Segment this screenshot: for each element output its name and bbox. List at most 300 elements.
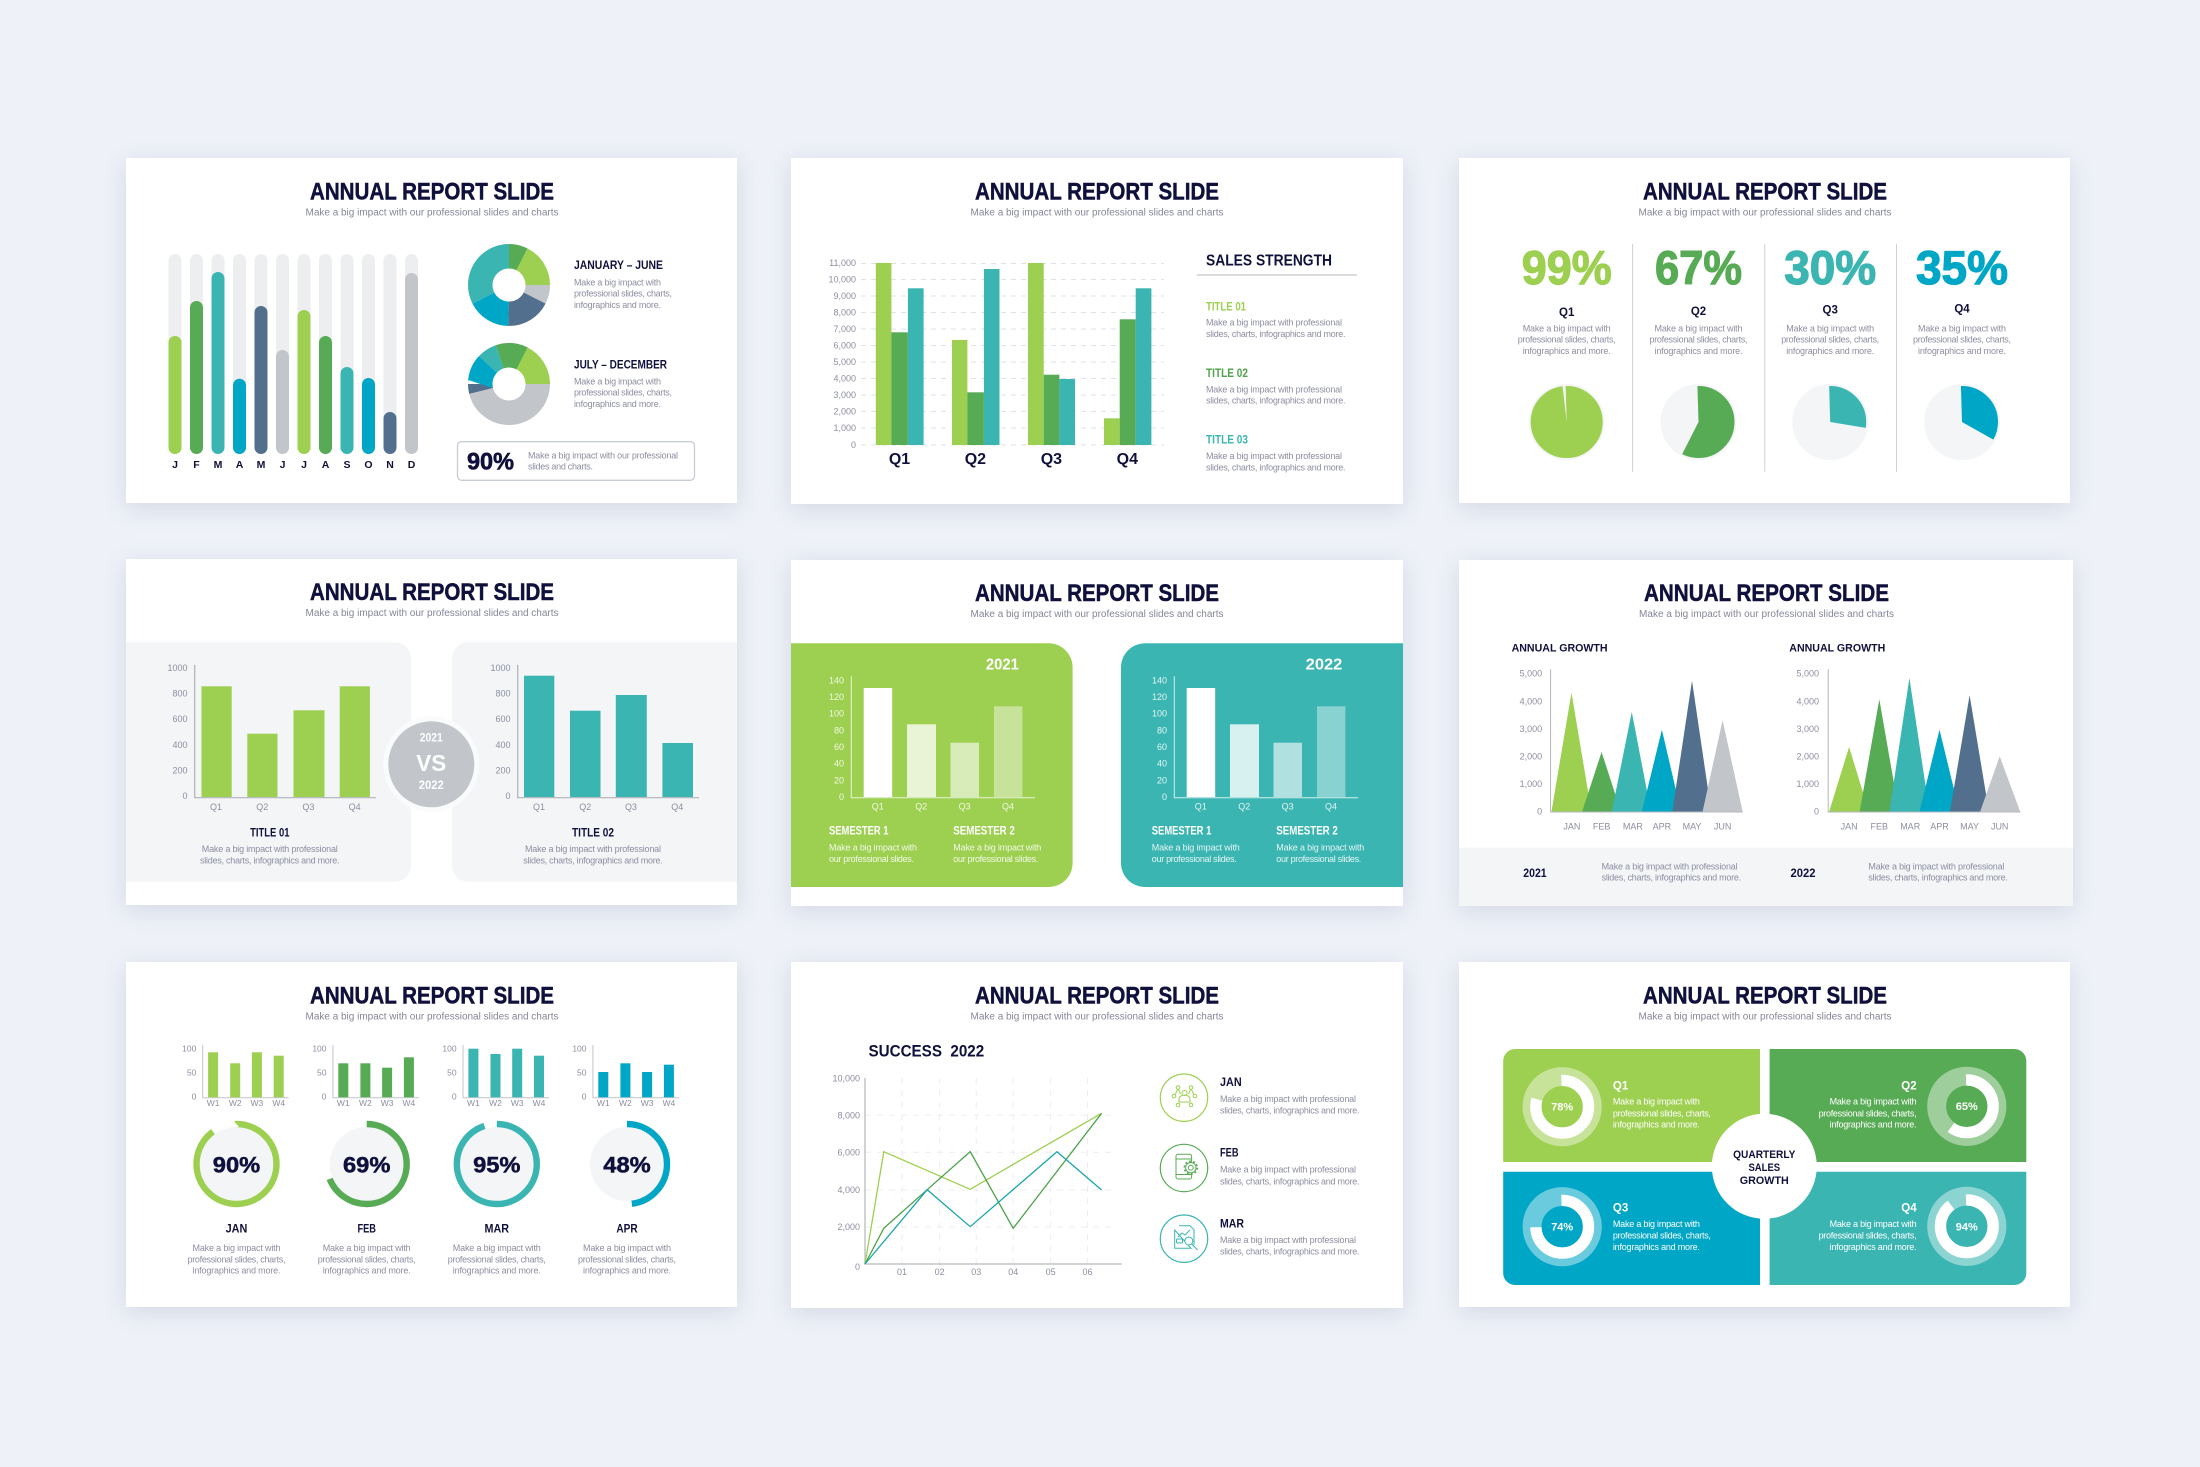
panel: Q4: 94% (1956, 1221, 1978, 1233)
icon: phone with gear (1160, 1144, 1208, 1192)
panel: 2022 teal: 80 (1157, 725, 1167, 735)
panel: 2021 green: our professional slides. (829, 854, 914, 864)
chart: annual growth 2022: JUN (1991, 822, 2008, 832)
column: February: W3 (381, 1098, 394, 1108)
text block: February: Make a big impact with professional (1220, 1165, 1356, 1175)
footer band with notes: Make a big impact with professional (1868, 861, 2004, 871)
text block: title 02: slides, charts, infographics and more. (1206, 396, 1346, 406)
text block: January (1220, 1077, 1360, 1115)
chart: line chart (832, 1073, 1122, 1277)
panel: Q3: Make a big impact with (1613, 1219, 1700, 1229)
column: January: 50 (187, 1067, 197, 1077)
chart: annual growth 2022: 1,000 (1796, 779, 1819, 789)
panel: 2021 green: SEMESTER 2 (953, 826, 1015, 838)
chart: grouped bars by quarter: Q4 (1117, 451, 1138, 468)
chart: annual growth 2022: APR (1930, 822, 1949, 832)
column: Q4 35 percent: professional slides, charts, (1913, 335, 2011, 345)
chart: line chart: 10,000 (832, 1073, 860, 1083)
panel: 2021 green: Q1 (872, 801, 884, 811)
chart: monthly rounded bars: M (257, 459, 266, 471)
chart: monthly rounded bars: N (386, 459, 394, 471)
text block: January: Make a big impact with professional (1220, 1094, 1356, 1104)
chart: left bars title 01: 1000 (167, 663, 188, 673)
panel: 2021 green: our professional slides. (953, 854, 1038, 864)
chart: annual growth 2021: 2,000 (1520, 752, 1542, 762)
chart: grouped bars by quarter: 8,000 (833, 308, 856, 318)
chart: annual growth 2021: 1,000 (1520, 779, 1542, 789)
column: February: W4 (403, 1098, 416, 1108)
chart: grouped bars by quarter: 3,000 (833, 390, 856, 400)
column: April: 100 (572, 1043, 587, 1053)
panel: 2021 green: Make a big impact with (829, 842, 917, 852)
text block: title 02: slides, charts, infographics and more. (523, 855, 663, 865)
text block: July to December: infographics and more. (574, 399, 661, 409)
panel: 2021 green: Make a big impact with (953, 842, 1041, 852)
column: January: 100 (182, 1043, 197, 1053)
panel: 2022 teal: Make a big impact with (1152, 842, 1240, 852)
subtitle: Make a big impact with our professional slides and charts (970, 208, 1224, 218)
column: April: infographics and more. (583, 1266, 671, 1276)
column: Q1 99 percent: infographics and more. (1523, 346, 1611, 356)
panel: 2021 green: 40 (834, 759, 844, 769)
panel: slide 5 yearly semester bars (791, 560, 1403, 906)
column: February: infographics and more. (323, 1266, 411, 1276)
column: February: W2 (359, 1098, 372, 1108)
chart: left bars title 01: 400 (172, 740, 188, 750)
panel: 2021 green: Q3 (959, 801, 971, 811)
chart: line chart: 02 (935, 1267, 945, 1277)
panel: Q1: professional slides, charts, (1613, 1108, 1711, 1118)
column: April: W2 (619, 1098, 632, 1108)
column: February (312, 1043, 419, 1276)
text block: title 01: Make a big impact with professional (202, 844, 338, 854)
chart: grouped bars by quarter: 0 (851, 440, 856, 450)
chart: right bars title 02 (490, 663, 699, 812)
chart: right bars title 02: 600 (495, 714, 510, 724)
text block: title 03: TITLE 03 (1206, 434, 1248, 446)
text block: title 03: Make a big impact with professional (1206, 451, 1342, 461)
panel: 2022 teal: Q1 (1195, 801, 1207, 811)
column: Q1 99 percent: Q1 (1559, 307, 1575, 319)
panel: 2021 green: 2021 (986, 657, 1019, 674)
text block: title 01 (1206, 301, 1346, 339)
panel: 2022 teal: 2022 (1306, 657, 1342, 674)
badge: 2021 vs 2022: 2022 (419, 778, 444, 792)
panel: Q2: infographics and more. (1830, 1120, 1917, 1130)
chart: annual growth 2022: FEB (1871, 822, 1888, 832)
chart: annual growth 2021: FEB (1593, 822, 1610, 832)
callout: 90 percent: slides and charts. (528, 462, 593, 472)
column: January: W3 (251, 1098, 264, 1108)
text block: title 01 (200, 828, 340, 865)
footer band with notes (1459, 848, 2073, 906)
column: Q4 35 percent: infographics and more. (1918, 346, 2006, 356)
panel: Q4 (1770, 1172, 2026, 1285)
column: Q3 30 percent: Q3 (1823, 305, 1838, 317)
chart: grouped bars by quarter: Q3 (1041, 451, 1062, 468)
chart: line chart: 05 (1046, 1267, 1056, 1277)
callout: 90 percent: Make a big impact with our professional (528, 450, 678, 460)
column: March: W1 (467, 1098, 480, 1108)
chart: donut July to December (480, 355, 538, 413)
column: January: 0 (192, 1091, 197, 1101)
chart: annual growth 2021: APR (1653, 822, 1672, 832)
text block: title 01: TITLE 01 (1206, 301, 1246, 313)
chart: right bars title 02: 200 (495, 766, 510, 776)
text block: title 03 (1206, 434, 1346, 472)
chart: line chart: 0 (855, 1262, 860, 1272)
column: Q1 99 percent: 99% (1522, 241, 1612, 294)
footer band with notes: 2022 (1790, 866, 1816, 880)
panel: Q3: infographics and more. (1613, 1242, 1700, 1252)
chart: grouped bars by quarter: Q1 (889, 451, 910, 468)
subtitle: Make a big impact with our professional slides and charts (970, 1012, 1224, 1022)
panel: Q1: Make a big impact with (1613, 1097, 1700, 1107)
column: April: W4 (663, 1098, 676, 1108)
panel: 2022 teal: 40 (1157, 759, 1167, 769)
panel: 2021 green (791, 643, 1073, 887)
badge: 2021 vs 2022: 2021 (420, 731, 443, 745)
column: April: APR (616, 1224, 638, 1236)
panel: 2022 teal: 0 (1162, 792, 1167, 802)
chart: annual growth 2021: 3,000 (1520, 724, 1542, 734)
chart: grouped bars by quarter: 11,000 (829, 258, 856, 268)
chart: monthly rounded bars: J (280, 459, 286, 471)
chart: monthly rounded bars: D (408, 459, 416, 471)
column: Q2 67 percent: Q2 (1691, 306, 1706, 318)
column: Q1 99 percent (1518, 241, 1616, 460)
panel: Q1: Q1 (1613, 1081, 1629, 1093)
chart: left bars title 01: Q3 (302, 802, 314, 812)
column: Q2 67 percent: professional slides, charts, (1650, 335, 1748, 345)
panel: 2022 teal: SEMESTER 1 (1152, 826, 1212, 838)
chart: annual growth 2021: 5,000 (1520, 669, 1542, 679)
text block: January: JAN (1220, 1077, 1242, 1089)
column: March: MAR (485, 1224, 510, 1236)
column: January: W1 (207, 1098, 220, 1108)
chart: annual growth 2022: 5,000 (1796, 669, 1819, 679)
panel: 2021 green: Q2 (915, 801, 927, 811)
badge: quarterly sales growth: QUARTERLY (1733, 1149, 1796, 1161)
chart: annual growth 2021 (1512, 642, 1743, 832)
text block: March (1220, 1218, 1360, 1256)
footer band with notes: 2021 (1523, 866, 1547, 880)
title: ANNUAL REPORT SLIDE (975, 982, 1219, 1009)
column: February: professional slides, charts, (318, 1254, 416, 1264)
column: March: 100 (442, 1043, 457, 1053)
panel: slide 7 monthly rings (126, 962, 737, 1307)
heading: sales strength: SALES STRENGTH (1206, 253, 1332, 270)
panel: 2022 teal: 20 (1157, 775, 1167, 785)
chart: annual growth 2022: 0 (1814, 807, 1819, 817)
subtitle: Make a big impact with our professional slides and charts (1639, 609, 1894, 620)
panel: 2022 teal (1121, 643, 1403, 887)
chart: annual growth 2021: 0 (1537, 807, 1542, 817)
column: Q3 30 percent: Make a big impact with (1786, 323, 1874, 333)
text block: title 02: Make a big impact with professional (525, 844, 661, 854)
column: February: 50 (317, 1067, 327, 1077)
panel: slide 4 versus comparison (126, 559, 737, 905)
title: ANNUAL REPORT SLIDE (310, 579, 554, 606)
chart: monthly rounded bars: M (214, 459, 223, 471)
title: ANNUAL REPORT SLIDE (1644, 580, 1889, 607)
panel: Q2: Q2 (1901, 1081, 1917, 1093)
chart: left bars title 01: Q4 (349, 802, 361, 812)
panel: Q3: 74% (1551, 1222, 1573, 1234)
chart: line chart: 4,000 (837, 1185, 860, 1195)
column: February: 0 (322, 1091, 327, 1101)
column: Q2 67 percent (1650, 241, 1748, 460)
column: Q4 35 percent: Q4 (1954, 303, 1970, 315)
chart: line chart: 01 (897, 1267, 907, 1277)
column: January: Make a big impact with (192, 1243, 280, 1253)
column: March: infographics and more. (453, 1266, 541, 1276)
text block: January: slides, charts, infographics and more. (1220, 1105, 1360, 1115)
column: January: W4 (272, 1098, 285, 1108)
chart: monthly rounded bars: J (301, 459, 307, 471)
chart: annual growth 2022: ANNUAL GROWTH (1789, 642, 1885, 654)
panel: 2022 teal: 100 (1152, 709, 1167, 719)
panel: Q2: professional slides, charts, (1819, 1108, 1917, 1118)
chart: monthly rounded bars: O (364, 459, 373, 471)
chart: left bars title 01: 600 (172, 714, 188, 724)
column: January: professional slides, charts, (188, 1254, 286, 1264)
chart: annual growth 2021: ANNUAL GROWTH (1512, 642, 1608, 654)
column: Q4 35 percent: 35% (1916, 241, 2008, 294)
text block: January to June: Make a big impact with (574, 277, 661, 287)
column: April (572, 1043, 679, 1276)
chart: grouped bars by quarter: 1,000 (833, 423, 856, 433)
chart: left bars title 01: 800 (172, 688, 188, 698)
subtitle: Make a big impact with our professional slides and charts (1638, 1012, 1892, 1022)
chart: annual growth 2021: JUN (1714, 822, 1731, 832)
chart: annual growth 2022: 4,000 (1796, 696, 1819, 706)
panel: right comparison background (452, 642, 737, 882)
panel: 2021 green: 60 (834, 742, 844, 752)
text block: January to June (574, 260, 672, 310)
chart: grouped bars by quarter: 6,000 (833, 340, 856, 350)
column: February: 69% (343, 1153, 390, 1178)
panel: Q2: Make a big impact with (1830, 1097, 1917, 1107)
text block: title 02: Make a big impact with professional (1206, 384, 1342, 394)
chart: monthly rounded bars: J (172, 459, 178, 471)
chart: right bars title 02: Q4 (671, 802, 683, 812)
chart: line chart: 06 (1082, 1267, 1093, 1277)
panel: slide 1 monthly bars and donuts (126, 158, 737, 503)
chart: right bars title 02: 800 (495, 688, 510, 698)
text block: March: Make a big impact with professional (1220, 1235, 1356, 1245)
chart: monthly rounded bars (168, 254, 418, 471)
icon: people group (1160, 1074, 1208, 1121)
column: January: 90% (213, 1153, 260, 1178)
chart: annual growth 2021: MAR (1623, 822, 1643, 832)
chart: annual growth 2021: JAN (1563, 822, 1580, 832)
panel: Q2 (1770, 1049, 2026, 1162)
column: Q3 30 percent: professional slides, charts, (1781, 335, 1879, 345)
column: March: professional slides, charts, (448, 1254, 546, 1264)
panel: 2021 green: 0 (839, 792, 844, 802)
chart: monthly rounded bars: F (193, 459, 200, 471)
text block: January to June: JANUARY – JUNE (574, 260, 663, 272)
chart: grouped bars by quarter: 4,000 (833, 374, 856, 384)
column: February: FEB (357, 1224, 376, 1236)
chart: line chart: 04 (1008, 1267, 1018, 1277)
chart: left bars title 01: Q2 (256, 802, 268, 812)
column: Q3 30 percent (1781, 241, 1879, 460)
chart: line chart: 6,000 (837, 1147, 860, 1157)
panel: Q4: professional slides, charts, (1819, 1231, 1917, 1241)
text block: July to December: JULY – DECEMBER (574, 359, 668, 371)
badge: quarterly sales growth: GROWTH (1740, 1175, 1789, 1187)
column: Q3 30 percent: 30% (1784, 241, 1876, 294)
column: April: 48% (603, 1153, 651, 1178)
chart: monthly rounded bars: A (236, 459, 244, 471)
column: January: infographics and more. (192, 1266, 280, 1276)
column: Q2 67 percent: infographics and more. (1654, 346, 1742, 356)
panel: 2021 green: Q4 (1002, 801, 1014, 811)
panel: Q2: 65% (1956, 1101, 1978, 1113)
column: Q4 35 percent (1913, 241, 2011, 460)
chart: annual growth 2022: MAR (1900, 822, 1921, 832)
title: ANNUAL REPORT SLIDE (310, 982, 554, 1009)
chart: grouped bars by quarter: 2,000 (833, 406, 856, 416)
column: January (182, 1043, 289, 1276)
chart: right bars title 02: 400 (495, 740, 510, 750)
heading: success 2022: SUCCESS 2022 (868, 1043, 984, 1061)
column: March: Make a big impact with (453, 1243, 541, 1253)
chart: right bars title 02: 0 (505, 791, 510, 801)
column: March: 95% (473, 1153, 520, 1178)
chart: left bars title 01 (167, 663, 376, 812)
chart: annual growth 2022 (1789, 642, 2020, 832)
chart: donut January to June (480, 256, 538, 314)
text block: title 02: TITLE 02 (1206, 368, 1248, 380)
panel: Q1: 78% (1551, 1101, 1573, 1113)
panel: 2021 green: 80 (834, 725, 844, 735)
chart: right bars title 02: 1000 (490, 663, 510, 673)
chart: annual growth 2021: 4,000 (1520, 696, 1542, 706)
column: February: 100 (312, 1043, 327, 1053)
badge: quarterly sales growth (1712, 1114, 1817, 1219)
panel: 2022 teal: our professional slides. (1152, 854, 1237, 864)
column: March (442, 1043, 549, 1276)
panel: Q4: Q4 (1901, 1203, 1917, 1215)
column: March: W2 (489, 1098, 502, 1108)
chart: grouped bars by quarter: 5,000 (833, 357, 856, 367)
panel: 2021 green: 120 (829, 692, 844, 702)
panel: 2021 green: SEMESTER 1 (829, 826, 889, 838)
panel: slide 2 sales strength (791, 158, 1403, 504)
callout: 90 percent: 90% (467, 448, 514, 475)
chart: annual growth 2022: MAY (1960, 822, 1979, 832)
subtitle: Make a big impact with our professional slides and charts (306, 1012, 558, 1022)
column: January: W2 (229, 1098, 242, 1108)
chart: grouped bars by quarter: Q2 (965, 451, 986, 468)
panel: 2022 teal: SEMESTER 2 (1276, 826, 1338, 838)
subtitle: Make a big impact with our professional slides and charts (306, 208, 558, 218)
text block: title 02 (523, 828, 663, 865)
chart: line chart: 8,000 (837, 1110, 860, 1120)
chart: grouped bars by quarter: 7,000 (833, 324, 856, 334)
chart: annual growth 2021: MAY (1683, 822, 1701, 832)
column: January: JAN (226, 1224, 247, 1236)
subtitle: Make a big impact with our professional slides and charts (970, 609, 1224, 620)
text block: title 01: slides, charts, infographics and more. (1206, 329, 1346, 339)
column: February: W1 (337, 1098, 350, 1108)
title: ANNUAL REPORT SLIDE (975, 580, 1219, 607)
panel: 2022 teal: Q2 (1238, 801, 1250, 811)
panel: 2022 teal: Q4 (1325, 801, 1337, 811)
icon: document with magnifier (1160, 1215, 1208, 1262)
column: March: W4 (533, 1098, 546, 1108)
badge: quarterly sales growth: SALES (1748, 1162, 1780, 1174)
title: ANNUAL REPORT SLIDE (1643, 982, 1887, 1009)
text block: title 01: slides, charts, infographics and more. (200, 855, 340, 865)
subtitle: Make a big impact with our professional slides and charts (1638, 208, 1892, 218)
chart: grouped bars by quarter: 9,000 (833, 291, 856, 301)
chart: monthly rounded bars: S (343, 459, 351, 471)
text block: July to December (574, 359, 672, 409)
panel: Q3 (1503, 1172, 1760, 1285)
panel: 2022 teal: 140 (1152, 675, 1167, 685)
text block: March: slides, charts, infographics and more. (1220, 1246, 1360, 1256)
panel: slide 6 annual growth triangles (1459, 560, 2073, 906)
text block: title 02 (1206, 368, 1346, 406)
panel: Q4: Make a big impact with (1830, 1219, 1917, 1229)
text block: February: slides, charts, infographics and more. (1220, 1176, 1360, 1186)
title: ANNUAL REPORT SLIDE (1643, 179, 1887, 206)
panel: 2022 teal: Make a big impact with (1276, 842, 1364, 852)
column: Q3 30 percent: infographics and more. (1786, 346, 1874, 356)
chart: grouped bars by quarter: 10,000 (828, 274, 856, 284)
column: March: 0 (452, 1091, 457, 1101)
text block: July to December: Make a big impact with (574, 376, 661, 386)
column: April: W3 (641, 1098, 654, 1108)
panel: 2022 teal: 60 (1157, 742, 1167, 752)
footer band with notes: slides, charts, infographics and more. (1602, 873, 1741, 883)
panel: slide 8 line chart (791, 962, 1403, 1308)
panel: 2022 teal: our professional slides. (1276, 854, 1361, 864)
footer band with notes: slides, charts, infographics and more. (1868, 873, 2008, 883)
panel: Q4: infographics and more. (1830, 1242, 1917, 1252)
panel: slide 9 quarterly sales growth (1459, 962, 2070, 1307)
column: April: professional slides, charts, (578, 1254, 676, 1264)
column: Q1 99 percent: Make a big impact with (1523, 323, 1611, 333)
text block: title 01: TITLE 01 (250, 828, 290, 840)
panel: slide 3 quarterly percentages (1459, 158, 2070, 503)
panel: Q3: professional slides, charts, (1613, 1231, 1711, 1241)
chart: annual growth 2022: 3,000 (1796, 724, 1819, 734)
column: March: W3 (511, 1098, 524, 1108)
subtitle: Make a big impact with our professional slides and charts (306, 608, 558, 619)
chart: right bars title 02: Q1 (533, 802, 545, 812)
chart: grouped bars by quarter (828, 258, 1164, 468)
chart: right bars title 02: Q3 (625, 802, 637, 812)
footer band with notes: Make a big impact with professional (1602, 861, 1738, 871)
column: April: 50 (577, 1067, 587, 1077)
panel: 2022 teal: 120 (1152, 692, 1167, 702)
panel: 2021 green: 140 (829, 675, 844, 685)
text block: January to June: infographics and more. (574, 300, 661, 310)
column: Q2 67 percent: Make a big impact with (1654, 323, 1742, 333)
column: Q2 67 percent: 67% (1655, 241, 1742, 294)
title: ANNUAL REPORT SLIDE (975, 179, 1219, 206)
chart: annual growth 2022: 2,000 (1796, 752, 1819, 762)
panel: left comparison background (126, 642, 411, 882)
text block: title 02: TITLE 02 (572, 828, 614, 840)
chart: annual growth 2022: JAN (1841, 822, 1858, 832)
column: April: W1 (597, 1098, 610, 1108)
